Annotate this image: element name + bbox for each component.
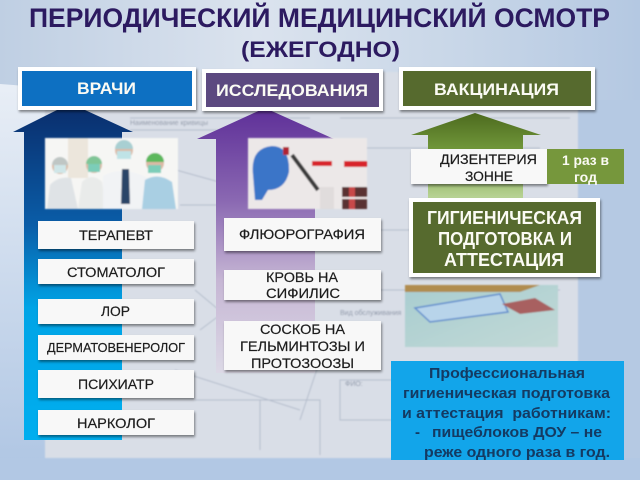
callout: professional training: - [415, 424, 420, 441]
background document: ФИО: [345, 381, 363, 388]
item: fluorography: ФЛЮОРОГРАФИЯ [239, 226, 365, 242]
callout: professional training: и аттестация работникам: [402, 405, 611, 422]
item: helminth scraping: ГЕЛЬМИНТОЗЫ И [240, 338, 365, 354]
item: syphilis blood test [224, 269, 381, 301]
photo: laboratory [248, 138, 367, 209]
title: (ЕЖЕГОДНО) [241, 37, 400, 62]
item: fluorography [224, 218, 381, 251]
item: dermatovenereologist [38, 335, 194, 360]
item: dentist: СТОМАТОЛОГ [67, 264, 165, 280]
frequency badge: год [574, 169, 597, 185]
arrow: research [197, 108, 334, 373]
item: syphilis blood test: КРОВЬ НА [266, 269, 339, 285]
item: therapist: ТЕРАПЕВТ [79, 227, 153, 243]
arrow: vaccination [411, 113, 541, 200]
callout: professional training: Профессиональная [429, 365, 585, 382]
frequency badge: 1 раз в [562, 152, 609, 168]
item: narcologist [38, 410, 194, 435]
header: doctors: ВРАЧИ [77, 79, 136, 98]
item: ENT [38, 299, 194, 324]
header: hygiene training: ГИГИЕНИЧЕСКАЯ [427, 208, 582, 228]
header: vaccination [401, 69, 593, 108]
frequency badge [547, 149, 624, 185]
title [29, 2, 610, 62]
item: psychiatrist: ПСИХИАТР [78, 376, 154, 392]
list: doctors [38, 221, 194, 435]
vaccine row: dysentery [411, 149, 547, 184]
header: vaccination: ВАКЦИНАЦИЯ [434, 80, 559, 99]
item: dentist [38, 259, 194, 284]
item: therapist [38, 221, 194, 249]
callout: professional training [391, 361, 624, 461]
header: hygiene training: ПОДГОТОВКА И [438, 229, 572, 249]
header: research [204, 71, 381, 109]
callout: professional training: гигиеническая подготовка [403, 385, 611, 402]
vaccine row: dysentery: ЗОННЕ [465, 168, 513, 184]
background document: Наименование кривицы [130, 120, 208, 127]
title: ПЕРИОДИЧЕСКИЙ МЕДИЦИНСКИЙ ОСМОТР [29, 2, 610, 33]
background document: Вид обслуживания [340, 309, 401, 317]
item: helminth scraping: СОСКОБ НА [260, 321, 346, 337]
item: psychiatrist [38, 370, 194, 398]
header: hygiene training: АТТЕСТАЦИЯ [444, 250, 564, 270]
photo: certificate [405, 285, 558, 347]
item: helminth scraping: ПРОТОЗООЗЫ [251, 355, 354, 371]
item: narcologist: НАРКОЛОГ [77, 415, 155, 431]
background document [45, 72, 578, 458]
header: hygiene training [411, 200, 598, 275]
item: dermatovenereologist: ДЕРМАТОВЕНЕРОЛОГ [47, 340, 185, 355]
item: helminth scraping [224, 321, 381, 371]
list: research [224, 218, 381, 371]
header: doctors [20, 69, 194, 108]
callout: professional training: пищеблоков ДОУ – не [432, 424, 602, 441]
callout: professional training: реже одного раза в год. [424, 444, 610, 461]
item: ENT: ЛОР [101, 303, 130, 319]
vaccine row: dysentery: ДИЗЕНТЕРИЯ [440, 151, 537, 167]
item: syphilis blood test: СИФИЛИС [266, 285, 340, 301]
arrow: doctors [13, 110, 133, 440]
photo: doctors [45, 138, 178, 209]
header: research: ИССЛЕДОВАНИЯ [216, 81, 368, 100]
